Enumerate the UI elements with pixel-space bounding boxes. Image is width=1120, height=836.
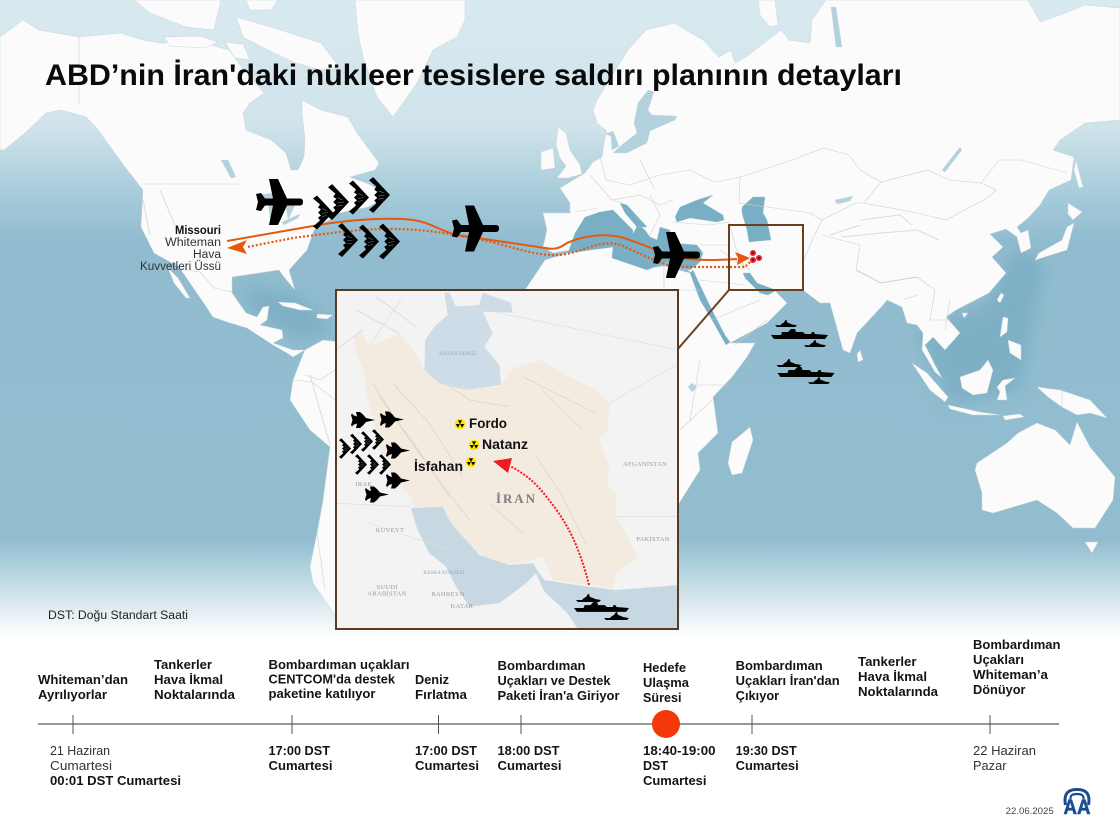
map labels: IRAK bbox=[355, 481, 373, 488]
step: leaving Iran: 19:30 DST bbox=[736, 744, 797, 758]
note: DST: DST: Doğu Standart Saati bbox=[48, 610, 188, 622]
Caspian Sea bbox=[423, 293, 513, 390]
label: Missouri Whiteman base: Kuvvetleri Üssü bbox=[140, 261, 221, 273]
step: time on target: Süresi bbox=[643, 691, 682, 705]
country borders bbox=[336, 297, 679, 550]
step: time on target: Cumartesi bbox=[643, 774, 706, 788]
date stamp: 22.06.2025 bbox=[1006, 806, 1054, 816]
label: Missouri Whiteman base: Hava bbox=[193, 249, 222, 261]
step: entering Iran bbox=[498, 659, 620, 773]
step: naval launch bbox=[415, 673, 479, 773]
icons: naval ships Arabian Sea bbox=[771, 320, 834, 384]
step: leaving Iran: Bombardıman bbox=[736, 659, 823, 673]
terrain bbox=[336, 297, 596, 543]
outbound flight route bbox=[227, 219, 750, 265]
nuclear site: İsfahan bbox=[414, 457, 476, 474]
step: bombers join CENTCOM: Cumartesi bbox=[268, 759, 332, 773]
title: ABD’nin İran'daki nükleer tesislere saldırı planının detayları bbox=[45, 59, 902, 92]
inland seas bbox=[568, 195, 777, 345]
step: bombers join CENTCOM: Bombardıman uçakları bbox=[268, 658, 410, 672]
step: entering Iran: Bombardıman bbox=[498, 659, 586, 673]
Iran locator box bbox=[677, 225, 803, 350]
missile strike arrow bbox=[493, 458, 589, 585]
step: return to Whiteman: Bombardıman bbox=[973, 638, 1060, 652]
label: Missouri Whiteman base bbox=[140, 225, 222, 273]
terrain streaks bbox=[143, 190, 939, 445]
step: bombers join CENTCOM bbox=[268, 658, 410, 773]
step: entering Iran: 18:00 DST bbox=[498, 744, 560, 758]
icons: bomber formation bbox=[313, 177, 400, 259]
step: time on target: DST bbox=[643, 759, 668, 773]
map labels: BASRA KÖRFEZİ bbox=[423, 570, 465, 576]
land masses bbox=[0, 0, 1120, 620]
map labels: KATAR bbox=[451, 603, 474, 610]
step: leaving Iran: Cumartesi bbox=[736, 759, 799, 773]
map labels: HAZAR DENİZİ bbox=[439, 351, 477, 357]
icons: inset bombers bbox=[339, 429, 391, 475]
step: tankers outbound: Hava İkmal bbox=[154, 672, 223, 687]
step: naval launch: Cumartesi bbox=[415, 759, 479, 773]
step: return to Whiteman: Dönüyor bbox=[973, 683, 1026, 697]
step: leaving Iran bbox=[736, 659, 840, 773]
map labels bbox=[355, 351, 670, 610]
timeline axis bbox=[38, 723, 1059, 725]
nuclear site: Fordo: Fordo bbox=[469, 416, 507, 431]
step: tankers return: Noktalarında bbox=[858, 685, 939, 699]
step: return to Whiteman: 22 Haziran bbox=[973, 744, 1036, 758]
label: Missouri Whiteman base: Whiteman bbox=[165, 237, 221, 249]
target time marker bbox=[652, 710, 680, 738]
step: bombers join CENTCOM: paketine katılıyor bbox=[268, 687, 376, 701]
step: tankers return: Tankerler bbox=[858, 655, 917, 669]
step: time on target: Hedefe bbox=[643, 661, 686, 675]
borders bbox=[79, 37, 1067, 590]
timeline ticks bbox=[73, 715, 990, 734]
step: return to Whiteman bbox=[973, 638, 1060, 773]
map labels: AFGANİSTAN bbox=[623, 461, 667, 468]
step: leaving Whiteman: 21 Haziran bbox=[50, 744, 110, 758]
step: return to Whiteman: Pazar bbox=[973, 759, 1006, 773]
panel: Iran inset map bbox=[336, 290, 679, 629]
nuclear site: İsfahan: İsfahan bbox=[414, 459, 463, 474]
step: return to Whiteman: Uçakları bbox=[973, 653, 1024, 667]
step: tankers return: Hava İkmal bbox=[858, 669, 927, 684]
map labels: SUUDİ bbox=[376, 584, 398, 591]
step: time on target: Ulaşma bbox=[643, 676, 690, 690]
step: leaving Whiteman: Ayrılıyorlar bbox=[38, 688, 107, 702]
step: tankers outbound: Noktalarında bbox=[154, 688, 236, 702]
step: leaving Whiteman bbox=[38, 673, 181, 788]
step: naval launch: Fırlatma bbox=[415, 688, 468, 702]
northern seas and lakes bbox=[221, 7, 962, 392]
icons: tanker planes bbox=[256, 179, 700, 278]
map labels: PAKİSTAN bbox=[636, 536, 670, 543]
return flight route bbox=[227, 229, 750, 267]
step: leaving Iran: Uçakları İran'dan bbox=[736, 673, 840, 688]
map labels: ARABİSTAN bbox=[367, 590, 407, 598]
target dots bbox=[750, 250, 762, 263]
İRAN label: İRAN bbox=[496, 491, 536, 506]
step: bombers join CENTCOM: 17:00 DST bbox=[268, 744, 330, 758]
logo: Anadolu Agency: AA bbox=[1064, 796, 1090, 819]
nuclear site: Natanz: Natanz bbox=[482, 437, 528, 452]
icons: inset ships bbox=[574, 594, 629, 620]
step: tankers outbound bbox=[154, 658, 236, 702]
step: naval launch: Deniz bbox=[415, 673, 449, 687]
map labels: KUVEYT bbox=[376, 527, 404, 534]
step: time on target bbox=[643, 661, 716, 788]
step: return to Whiteman: Whiteman’a bbox=[973, 668, 1049, 682]
step: time on target: 18:40-19:00 bbox=[643, 744, 716, 758]
world map background bbox=[0, 0, 1120, 636]
shelf seas bbox=[240, 245, 1045, 405]
icons: fighter jets bbox=[351, 412, 410, 502]
step: entering Iran: Cumartesi bbox=[498, 759, 562, 773]
step: leaving Whiteman: Cumartesi bbox=[50, 759, 112, 773]
timeline bbox=[38, 638, 1060, 788]
step: tankers return bbox=[858, 655, 939, 699]
label: Missouri Whiteman base: Missouri bbox=[175, 225, 221, 237]
map labels: BAHREYN bbox=[431, 591, 465, 598]
step: tankers outbound: Tankerler bbox=[154, 658, 212, 672]
step: entering Iran: Paketi İran'a Giriyor bbox=[498, 688, 620, 703]
Persian Gulf and Gulf of Oman bbox=[411, 507, 679, 628]
step: entering Iran: Uçakları ve Destek bbox=[498, 674, 611, 688]
step: bombers join CENTCOM: CENTCOM'da destek bbox=[268, 672, 395, 686]
step: leaving Iran: Çıkıyor bbox=[736, 689, 779, 703]
step: leaving Whiteman: Whiteman’dan bbox=[38, 673, 128, 687]
Iran territory bbox=[354, 332, 638, 588]
step: naval launch: 17:00 DST bbox=[415, 744, 477, 758]
step: leaving Whiteman: 00:01 DST Cumartesi bbox=[50, 774, 181, 788]
